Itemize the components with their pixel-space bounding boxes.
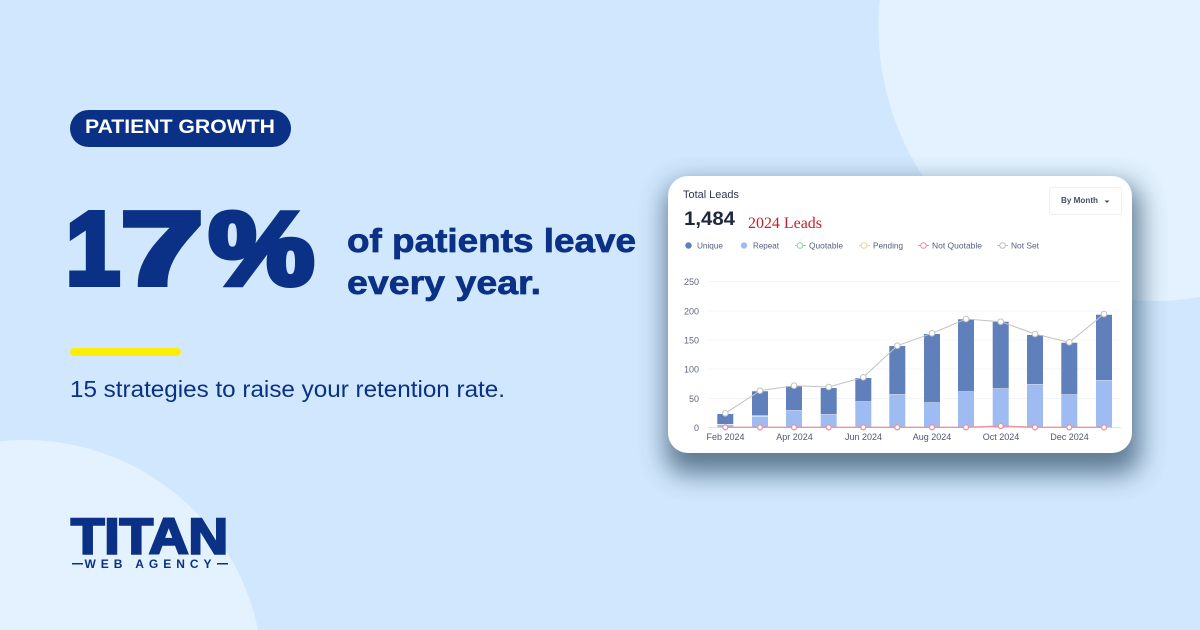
chart title: Total Leads <box>683 189 739 201</box>
logo: Titan Web Agency: TITAN <box>71 508 228 564</box>
big stat: 17%: 1 <box>66 191 120 306</box>
y axis labels: 200 <box>684 306 699 316</box>
big stat: 17% <box>66 191 314 306</box>
y axis labels: 0 <box>694 423 699 433</box>
x axis labels: Aug 2024 <box>913 432 951 442</box>
stacked bar chart <box>717 315 1112 428</box>
headline: of patients leave every year: every year. <box>347 264 541 301</box>
logo: Titan Web Agency: WEB AGENCY <box>84 557 212 571</box>
headline: of patients leave every year <box>347 222 636 301</box>
legend: Not Quotable <box>932 240 982 250</box>
legend <box>685 240 1040 250</box>
line: not quotable <box>723 424 1106 430</box>
y axis labels <box>684 277 699 433</box>
dropdown: by month: By Month <box>1061 195 1098 205</box>
legend: Repeat <box>753 240 780 250</box>
yellow accent bar <box>70 348 181 356</box>
y axis labels: 100 <box>684 364 699 374</box>
y axis labels: 50 <box>689 394 699 404</box>
card shadow <box>666 184 1140 474</box>
y axis labels: 150 <box>684 336 699 346</box>
x axis labels: Jun 2024 <box>845 432 882 442</box>
x axis labels: Oct 2024 <box>983 432 1019 442</box>
y axis labels: 250 <box>684 277 699 287</box>
big stat: 17%: % <box>209 191 314 306</box>
badge: patient growth <box>70 110 291 147</box>
red annotation: 2024 Leads <box>748 215 822 232</box>
x axis labels: Apr 2024 <box>776 432 813 442</box>
x axis labels: Feb 2024 <box>706 432 745 442</box>
dropdown: by month <box>1050 188 1122 214</box>
legend: Not Set <box>1011 240 1040 250</box>
legend: Quotable <box>809 240 843 250</box>
big stat: 17%: 7 <box>121 191 203 306</box>
x axis labels: Dec 2024 <box>1050 432 1089 442</box>
panel: total leads chart card <box>668 176 1132 453</box>
subheading: 15 strategies to raise your retention rate. <box>70 376 505 402</box>
legend: Unique <box>697 240 723 250</box>
headline: of patients leave every year: of patients leave <box>347 222 636 259</box>
badge: patient growth: PATIENT GROWTH <box>85 117 275 138</box>
x axis labels <box>706 432 1089 442</box>
legend: Pending <box>873 240 903 250</box>
total value: 1,484 <box>684 208 735 230</box>
line: not set <box>722 311 1107 416</box>
